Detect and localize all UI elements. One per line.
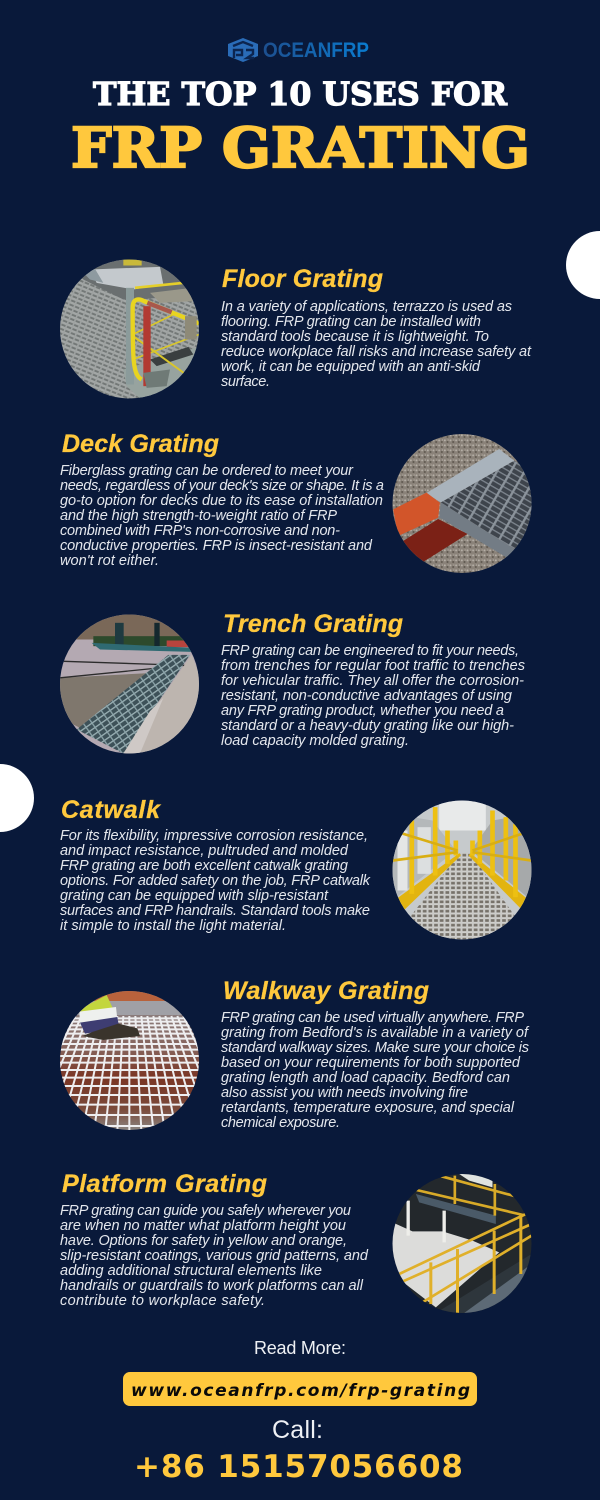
body text: grating from Bedford's is available in a variety of	[221, 1025, 530, 1041]
body text: FRP grating can be engineered to fit your needs,	[221, 643, 519, 659]
body text: are when no matter what platform height you	[60, 1218, 346, 1234]
body text: slip-resistant coatings, various grid patterns, and	[60, 1248, 369, 1264]
decorative circle: right edge	[566, 231, 600, 299]
body text	[221, 1010, 530, 1131]
body text	[60, 463, 384, 569]
body text: Fiberglass grating can be ordered to meet your	[60, 463, 354, 479]
body text: reduce workplace fall risks and increase safety at	[221, 344, 532, 360]
body text: In a variety of applications, terrazzo is used as	[221, 299, 512, 315]
footer: contact	[123, 1338, 477, 1485]
icon: logo hexagon	[228, 38, 258, 62]
title line 2: FRP GRATING	[71, 115, 530, 180]
body text: standard tools because it is lightweight. To	[221, 329, 489, 345]
body text: combined with FRP's non-corrosive and non-	[60, 523, 340, 539]
body text: adding additional structural elements like	[60, 1263, 322, 1279]
body text	[221, 299, 532, 390]
body text: based on your requirements for both supported	[221, 1055, 521, 1071]
body text: conductive properties. FRP is insect-resistant and	[60, 538, 373, 554]
panel: Trench Grating	[60, 610, 525, 753]
phone number: +86 15157056608	[134, 1449, 463, 1485]
photo: floor grating	[60, 260, 199, 398]
body text: work, it can be equipped with an anti-skid	[221, 359, 481, 375]
body text: go-to option for decks due to its ease of installation	[60, 493, 383, 509]
decorative circle: left edge	[0, 764, 34, 832]
logo wordmark: OCEANFRP	[263, 39, 369, 62]
body text: FRP grating are both excellent catwalk grating	[60, 858, 348, 874]
body text: resistant, non-conductive advantages of using	[221, 688, 512, 704]
body text: options. For added safety on the job, FRP catwalk	[60, 873, 371, 889]
body text: FRP grating can be used virtually anywhere. FRP	[221, 1010, 524, 1026]
body text: for vehicular traffic. They all offer the corrosion-	[221, 673, 524, 689]
body text: won't rot either.	[60, 553, 159, 569]
body text	[221, 643, 525, 749]
panel: Walkway Grating	[60, 980, 530, 1130]
body text: handrails or guardrails to work platforms can all	[60, 1278, 364, 1294]
call label: Call:	[272, 1416, 323, 1444]
body text: contribute to workplace safety.	[60, 1293, 265, 1309]
heading: Deck Grating	[62, 430, 219, 458]
photo: trench grating	[60, 614, 199, 753]
body text: surfaces and FRP handrails. Standard tools make	[60, 903, 370, 919]
body text: also assist you with needs involving fire	[221, 1085, 468, 1101]
body text: grating length and load capacity. Bedford can	[221, 1070, 510, 1086]
body text: it simple to install the light material.	[60, 918, 286, 934]
title line 1: THE TOP 10 USES FOR	[93, 76, 508, 113]
body text	[60, 1203, 369, 1309]
panel: Floor Grating	[60, 260, 532, 398]
logo: OceanFRP	[228, 38, 369, 62]
body text	[60, 828, 371, 934]
body text: For its flexibility, impressive corrosion resistance,	[60, 828, 368, 844]
title	[71, 76, 530, 180]
body text: and impact resistance, pultruded and molded	[60, 843, 349, 859]
body text: and the high strength-to-weight ratio of FRP	[60, 508, 337, 524]
body text: FRP grating can guide you safely wherever you	[60, 1203, 351, 1219]
url button: www.oceanfrp.com/frp-grating	[131, 1381, 470, 1401]
heading: Platform Grating	[62, 1170, 267, 1198]
body text: chemical exposure.	[221, 1115, 340, 1131]
body text: grating can be equipped with slip-resistant	[60, 888, 329, 904]
photo: walkway grating	[60, 991, 199, 1130]
panel: Deck Grating	[60, 430, 531, 573]
url button	[123, 1372, 477, 1406]
photo: deck grating	[392, 434, 531, 573]
body text: from trenches for regular foot traffic to trenches	[221, 658, 525, 674]
body text: flooring. FRP grating can be installed with	[221, 314, 481, 330]
photo: platform grating	[392, 1174, 531, 1313]
body text: needs, regardless of your deck's size or shape. It is a	[60, 478, 384, 494]
panel: Catwalk	[60, 796, 531, 939]
body text: load capacity molded grating.	[221, 733, 409, 749]
body text: retardants, temperature exposure, and special	[221, 1100, 515, 1116]
read more label: Read More:	[254, 1338, 346, 1358]
body text: surface.	[221, 374, 270, 390]
heading: Catwalk	[61, 796, 161, 824]
body text: standard walkway sizes. Make sure your choice is	[221, 1040, 529, 1056]
heading: Floor Grating	[222, 265, 383, 293]
body text: any FRP grating product, whether you need a	[221, 703, 504, 719]
heading: Walkway Grating	[223, 977, 429, 1005]
body text: have. Options for safety in yellow and orange,	[60, 1233, 347, 1249]
photo: catwalk	[392, 800, 531, 939]
panel: Platform Grating	[60, 1170, 531, 1313]
body text: standard or a heavy-duty grating like our high-	[221, 718, 514, 734]
heading: Trench Grating	[223, 610, 403, 638]
